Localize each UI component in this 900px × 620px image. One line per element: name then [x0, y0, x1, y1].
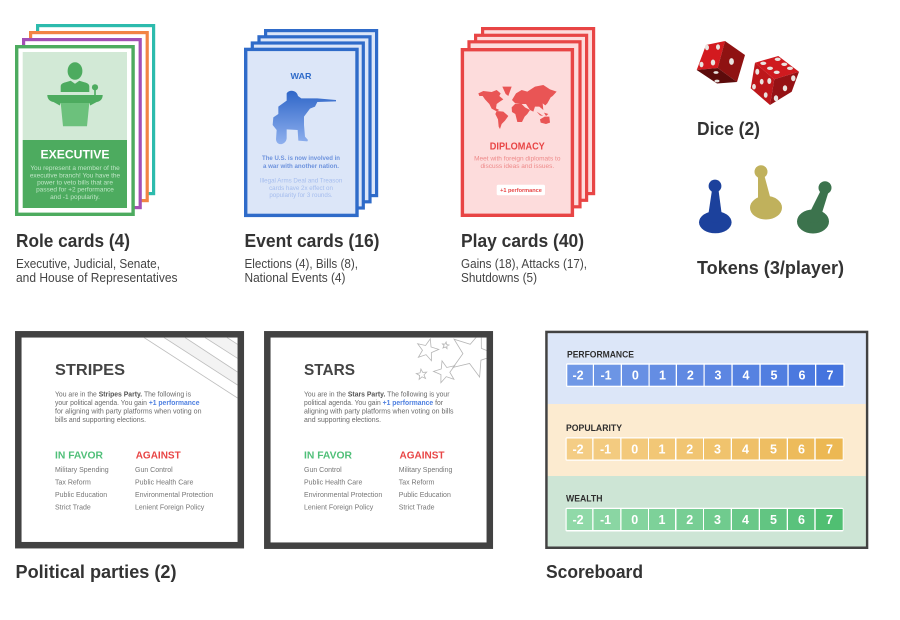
section: performance: PERFORMANCE [567, 350, 634, 360]
card text [474, 156, 561, 170]
party title: STRIPES [55, 362, 125, 379]
against list: Tax Reform [399, 480, 435, 487]
card text [30, 165, 121, 201]
in favor list: Gun Control [304, 467, 342, 474]
section: wealth: 0 [631, 513, 638, 527]
section: popularity [548, 404, 866, 476]
against list [399, 449, 452, 512]
section: wealth: 3 [714, 513, 721, 527]
panel: scoreboard [546, 332, 867, 548]
heading: Event cards (16) [244, 231, 380, 251]
section: performance: 2 [687, 368, 694, 382]
section: popularity: 0 [631, 442, 638, 456]
in favor list: Tax Reform [55, 480, 91, 487]
card stack: teal, orange and purple cards [24, 26, 154, 208]
party description: You are in the Stars Party. The following is your [304, 392, 450, 399]
party title: STARS [304, 362, 355, 379]
section: popularity: 3 [714, 442, 721, 456]
section: wealth: 5 [770, 513, 777, 527]
card frame [267, 334, 490, 546]
card text: The U.S. is now involved in [262, 155, 340, 162]
section: performance: 3 [715, 368, 722, 382]
icon: green token [797, 181, 832, 234]
section: popularity: 7 [826, 442, 833, 456]
against list: AGAINST [400, 449, 445, 461]
panel: stripes party [18, 334, 241, 545]
section: performance: 6 [799, 368, 806, 382]
section: performance [548, 333, 866, 404]
party description: You are in the Stripes Party. The following is [55, 392, 191, 399]
section: performance: 0 [632, 368, 639, 382]
icon: kneeling soldier [273, 91, 336, 144]
icon: yellow token [750, 165, 782, 220]
section: popularity: 5 [770, 442, 777, 456]
card text: Meet with foreign diplomats to [474, 156, 561, 163]
against list: Environmental Protection [135, 492, 213, 499]
description: National Events (4) [244, 270, 346, 285]
card frame [18, 334, 241, 545]
in favor list [304, 449, 382, 512]
card text: discuss ideas and issues. [480, 163, 554, 170]
section: wealth: 6 [798, 513, 805, 527]
card text: passed for +2 performance [36, 187, 114, 194]
card title: EXECUTIVE [40, 149, 110, 161]
section: wealth [548, 476, 866, 546]
in favor list: Public Health Care [304, 480, 362, 487]
performance badge [497, 185, 545, 195]
performance badge: +1 performance [500, 188, 542, 194]
panel: dice [697, 41, 799, 139]
card: war [246, 49, 357, 215]
against list [135, 449, 213, 512]
card text: Illegal Arms Deal and Treason [260, 178, 343, 185]
section: wealth: 1 [659, 513, 666, 527]
in favor list: IN FAVOR [304, 449, 352, 461]
panel: tokens [697, 165, 844, 278]
section: performance: 7 [827, 368, 834, 382]
card: executive [17, 47, 133, 214]
section: wealth: WEALTH [566, 494, 602, 504]
card text: You represent a member of the [30, 165, 120, 172]
heading: scoreboard: Scoreboard [546, 562, 643, 582]
in favor list: Military Spending [55, 467, 109, 474]
heading: Play cards (40) [461, 231, 584, 251]
against list: AGAINST [136, 449, 181, 461]
icon: left die [697, 41, 745, 84]
description [16, 256, 178, 285]
party description: aligning with party platforms when voting on bills [304, 409, 454, 416]
section: wealth: -1 [600, 513, 611, 527]
card stack: blue cards [252, 31, 377, 208]
in favor list: IN FAVOR [55, 449, 103, 461]
card text: executive branch! You have the [30, 172, 121, 180]
heading: Role cards (4) [16, 231, 130, 251]
in favor list [55, 449, 109, 512]
party description: and supporting elections. [304, 417, 381, 424]
party description: bills and supporting elections. [55, 417, 146, 424]
card text: popularity for 3 rounds. [269, 192, 333, 199]
panel: role cards [16, 26, 178, 285]
description: Elections (4), Bills (8), [244, 256, 358, 271]
panel: event cards [244, 31, 380, 285]
party description [304, 392, 454, 424]
card title: DIPLOMACY [490, 140, 545, 152]
in favor list: Public Education [55, 492, 107, 499]
stars decoration [415, 338, 486, 384]
heading: political parties: Political parties (2) [16, 562, 176, 582]
card text: power to veto bills that are [37, 180, 113, 187]
against list: Strict Trade [399, 504, 435, 512]
section: wealth: 4 [742, 513, 749, 527]
icon: world map [478, 85, 557, 129]
description [461, 256, 587, 285]
section: performance: -1 [600, 368, 612, 382]
icon: right die [751, 56, 799, 105]
section: performance: 5 [771, 368, 778, 382]
description: Gains (18), Attacks (17), [461, 256, 587, 271]
party description: your political agenda. You gain +1 performance [55, 400, 200, 407]
against list: Public Education [399, 492, 451, 499]
section: popularity: POPULARITY [566, 423, 622, 433]
section: popularity: 2 [686, 442, 693, 456]
card text [260, 155, 343, 199]
card text: and -1 popularity. [50, 194, 100, 201]
section: performance: 4 [743, 368, 750, 382]
stripes decoration [144, 338, 238, 398]
panel: play cards [461, 29, 594, 285]
party description [55, 392, 202, 424]
description [244, 256, 358, 285]
party description: political agenda. You gain +1 performance for [304, 400, 444, 407]
card text: cards have 2x effect on [269, 185, 333, 192]
in favor list: Lenient Foreign Policy [304, 504, 374, 512]
panel: stars party [267, 324, 503, 546]
section: wealth: -2 [572, 513, 584, 527]
section: popularity: 4 [742, 442, 749, 456]
icon: speaker at podium [47, 62, 103, 126]
card title: WAR [290, 71, 312, 81]
against list: Public Health Care [135, 480, 193, 487]
section: wealth: 2 [686, 513, 693, 527]
description: Executive, Judicial, Senate, [16, 256, 160, 271]
in favor list: Environmental Protection [304, 492, 382, 499]
description: Shutdowns (5) [461, 270, 537, 285]
section: popularity: 6 [798, 442, 805, 456]
against list: Military Spending [399, 467, 452, 474]
section: popularity: -2 [572, 442, 584, 456]
section: popularity: 1 [659, 442, 666, 456]
card text: a war with another nation. [263, 163, 339, 170]
against list: Gun Control [135, 467, 173, 474]
heading: Dice (2) [697, 119, 760, 139]
in favor list: Strict Trade [55, 504, 91, 512]
party description: for aligning with party platforms when voting on [55, 409, 202, 416]
heading: Tokens (3/player) [697, 258, 844, 278]
icon: blue token [699, 180, 732, 233]
section: popularity: -1 [600, 442, 611, 456]
scoreboard frame [546, 332, 867, 548]
card: diplomacy [462, 50, 572, 215]
section: performance: -2 [572, 368, 584, 382]
section: performance: 1 [659, 368, 666, 382]
card stack: red cards [469, 29, 594, 207]
description: and House of Representatives [16, 270, 178, 285]
against list: Lenient Foreign Policy [135, 504, 205, 512]
section: wealth: 7 [826, 513, 833, 527]
